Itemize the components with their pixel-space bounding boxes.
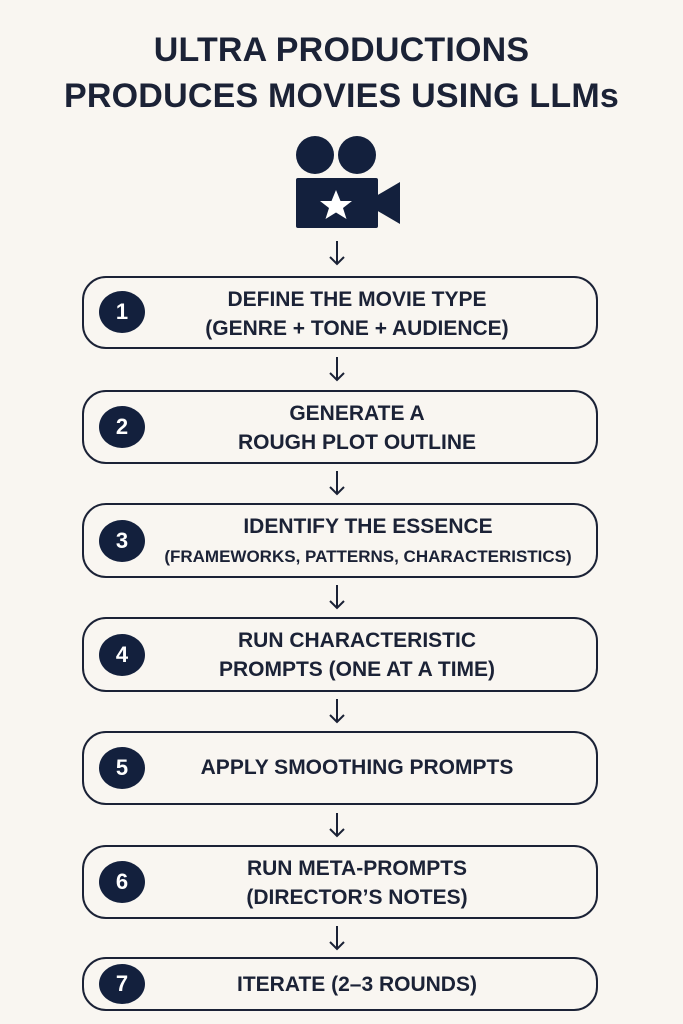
step 3: IDENTIFY THE ESSENCE xyxy=(243,515,493,538)
arrow xyxy=(329,813,345,838)
step 7: 7 xyxy=(116,971,128,996)
step 3: 3 xyxy=(116,528,128,553)
step 1: (GENRE + TONE + AUDIENCE) xyxy=(205,317,509,340)
step 1 xyxy=(82,276,598,349)
step 1: DEFINE THE MOVIE TYPE xyxy=(227,288,487,311)
arrow xyxy=(329,357,345,382)
step 2: 2 xyxy=(116,414,128,439)
title xyxy=(64,31,619,115)
step 2 xyxy=(82,390,598,464)
step 4: 4 xyxy=(116,642,128,667)
arrow xyxy=(329,699,345,724)
arrow xyxy=(329,585,345,610)
title: PRODUCES MOVIES USING LLMs xyxy=(64,77,619,115)
step 6: RUN META-PROMPTS xyxy=(247,857,467,880)
step 2: GENERATE A xyxy=(289,402,425,425)
step 1: 1 xyxy=(116,299,128,324)
step 5: APPLY SMOOTHING PROMPTS xyxy=(201,756,513,779)
title: ULTRA PRODUCTIONS xyxy=(154,31,529,69)
step 7 xyxy=(82,957,598,1011)
step 6 xyxy=(82,845,598,919)
step 4: PROMPTS (ONE AT A TIME) xyxy=(219,658,495,681)
step 7: ITERATE (2–3 ROUNDS) xyxy=(237,973,477,996)
step 2: ROUGH PLOT OUTLINE xyxy=(238,431,476,454)
icon: movie camera xyxy=(296,136,400,228)
step 4: RUN CHARACTERISTIC xyxy=(238,629,476,652)
arrow xyxy=(329,241,345,266)
step 5: 5 xyxy=(116,755,128,780)
arrow xyxy=(329,471,345,496)
arrow xyxy=(329,926,345,950)
step 4 xyxy=(82,617,598,692)
step 3 xyxy=(82,503,598,578)
step 6: 6 xyxy=(116,869,128,894)
step 5 xyxy=(82,731,598,805)
step 3: (FRAMEWORKS, PATTERNS, CHARACTERISTICS) xyxy=(164,547,572,566)
step 6: (DIRECTOR’S NOTES) xyxy=(246,886,468,909)
